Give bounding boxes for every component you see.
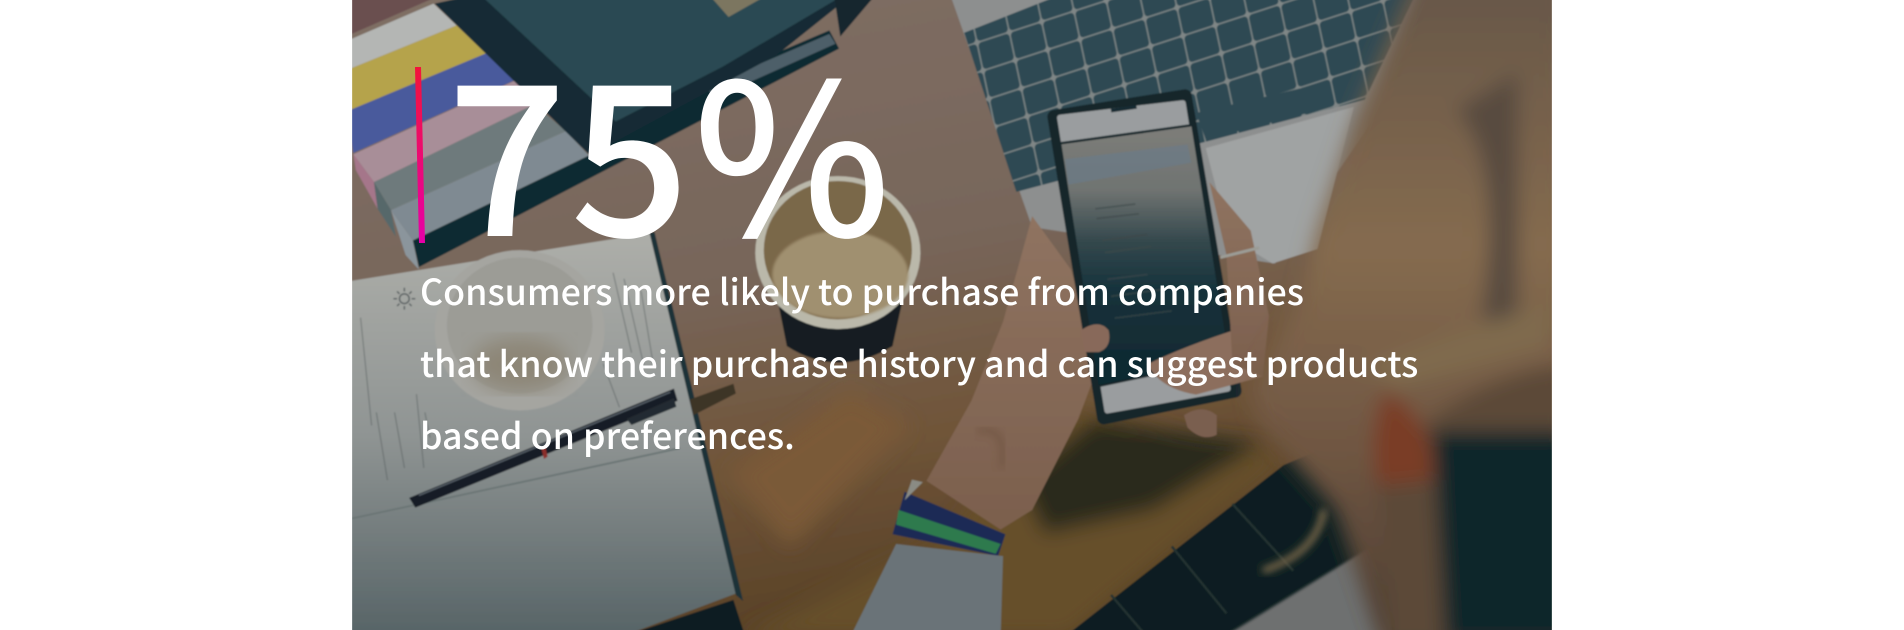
handwriting on notebook [361,273,653,480]
sweater sleeve [850,544,1003,630]
fingers over phone [1081,182,1269,437]
coffee cup [755,176,920,362]
area under the table [1072,457,1362,630]
plastic lid [435,250,605,410]
pen [409,384,736,508]
phone screen rows [1095,204,1172,318]
infographic stage [352,0,1552,630]
hand holding phone, left [926,216,1099,529]
wooden table [340,0,1566,630]
description text: based on preferences. [420,408,795,460]
hair strand over table [1263,510,1324,571]
dark books [413,0,874,267]
under table slats [1111,504,1293,630]
wood grain shading [741,408,1279,630]
laptop [951,0,1433,264]
phone [1054,96,1235,418]
description text: that know their purchase history and can suggest products [420,336,1418,388]
shirt [1230,552,1389,630]
description text [420,264,1418,460]
notebook [346,232,746,630]
accent bar [415,67,425,243]
striped book [346,0,589,270]
big statistic: 75% [447,0,894,297]
icon: sun doodle [393,288,415,310]
background photo: desk scene with phone [352,0,1552,630]
description text: Consumers more likely to purchase from companies [420,264,1304,316]
woman's hair and head [1251,0,1566,630]
wristband [892,480,1005,556]
